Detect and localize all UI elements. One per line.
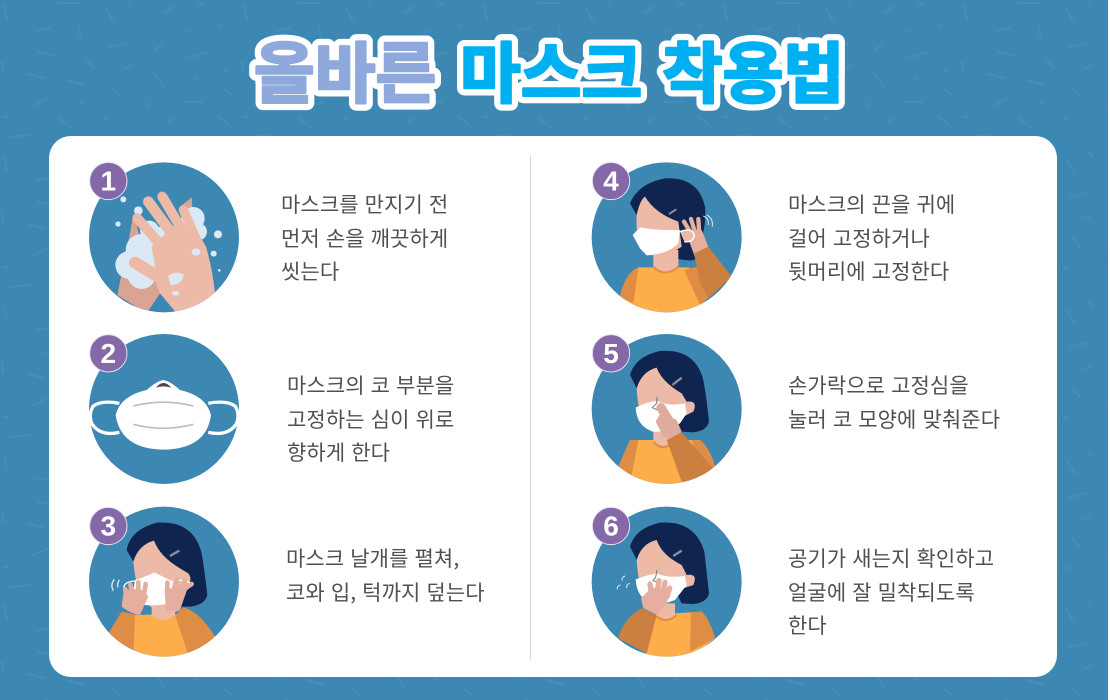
icon: woman fixing ear loop — [592, 162, 742, 312]
badge: number 1: 1 — [101, 166, 116, 197]
step 4 — [592, 162, 955, 312]
badge: number 4: 4 — [603, 166, 619, 197]
text: step 3: 코와 입, 턱까지 덮는다 — [286, 577, 485, 607]
icon: woman checking air leak — [592, 506, 742, 657]
badge: number 6: 6 — [603, 511, 619, 542]
icon: mask — [89, 334, 239, 484]
badge: number 2: 2 — [101, 338, 116, 369]
text: step 5: 눌러 코 모양에 맞춰준다 — [788, 404, 1000, 434]
step 2 — [89, 334, 454, 484]
badge: number 1 — [90, 162, 127, 200]
title: 착용법 — [662, 21, 844, 117]
badge: number 5: 5 — [603, 338, 619, 369]
badge: number 4 — [592, 162, 630, 200]
text: step 1 — [281, 189, 448, 286]
title: 마스크 — [460, 21, 642, 117]
text: step 2: 마스크의 코 부분을 — [287, 370, 454, 400]
badge: number 3 — [90, 507, 127, 545]
step 6 — [592, 506, 994, 657]
title — [249, 21, 845, 117]
badge: number 3: 3 — [101, 511, 116, 542]
text: step 4: 뒷머리에 고정한다 — [788, 256, 949, 286]
text: step 2: 향하게 한다 — [287, 437, 390, 467]
text: step 6 — [788, 543, 994, 640]
text: step 1: 먼저 손을 깨끗하게 — [281, 223, 448, 253]
text: step 4 — [788, 189, 955, 286]
text: step 6: 공기가 새는지 확인하고 — [788, 543, 994, 573]
step 1 — [89, 162, 448, 312]
text: step 1: 씻는다 — [281, 256, 339, 286]
badge: number 5 — [592, 335, 630, 372]
text: step 1: 마스크를 만지기 전 — [281, 189, 448, 219]
title: 마스크 — [460, 21, 642, 117]
step 5 — [592, 334, 1000, 484]
text: step 6: 한다 — [788, 610, 827, 640]
text: step 3: 마스크 날개를 펼쳐, — [286, 543, 459, 573]
text: step 2: 고정하는 심이 위로 — [287, 404, 454, 434]
title: 올바른 — [254, 21, 436, 117]
text: step 4: 걸어 고정하거나 — [788, 223, 930, 253]
panel: instructions card — [49, 136, 1057, 677]
step 3 — [89, 506, 485, 657]
title: 착용법 — [662, 21, 844, 117]
text: step 4: 마스크의 끈을 귀에 — [788, 189, 955, 219]
text: step 2 — [287, 370, 454, 467]
badge: number 6 — [592, 507, 630, 545]
icon: washing hands — [89, 162, 239, 312]
icon: woman pressing nose wire — [592, 334, 742, 484]
icon: woman unfolding mask — [89, 506, 239, 657]
text: step 5: 손가락으로 고정심을 — [788, 370, 969, 400]
text: step 6: 얼굴에 잘 밀착되도록 — [788, 577, 975, 607]
title: 올바른 — [254, 21, 436, 117]
badge: number 2 — [90, 335, 127, 372]
text: step 5 — [788, 370, 1000, 434]
text: step 3 — [286, 543, 485, 607]
